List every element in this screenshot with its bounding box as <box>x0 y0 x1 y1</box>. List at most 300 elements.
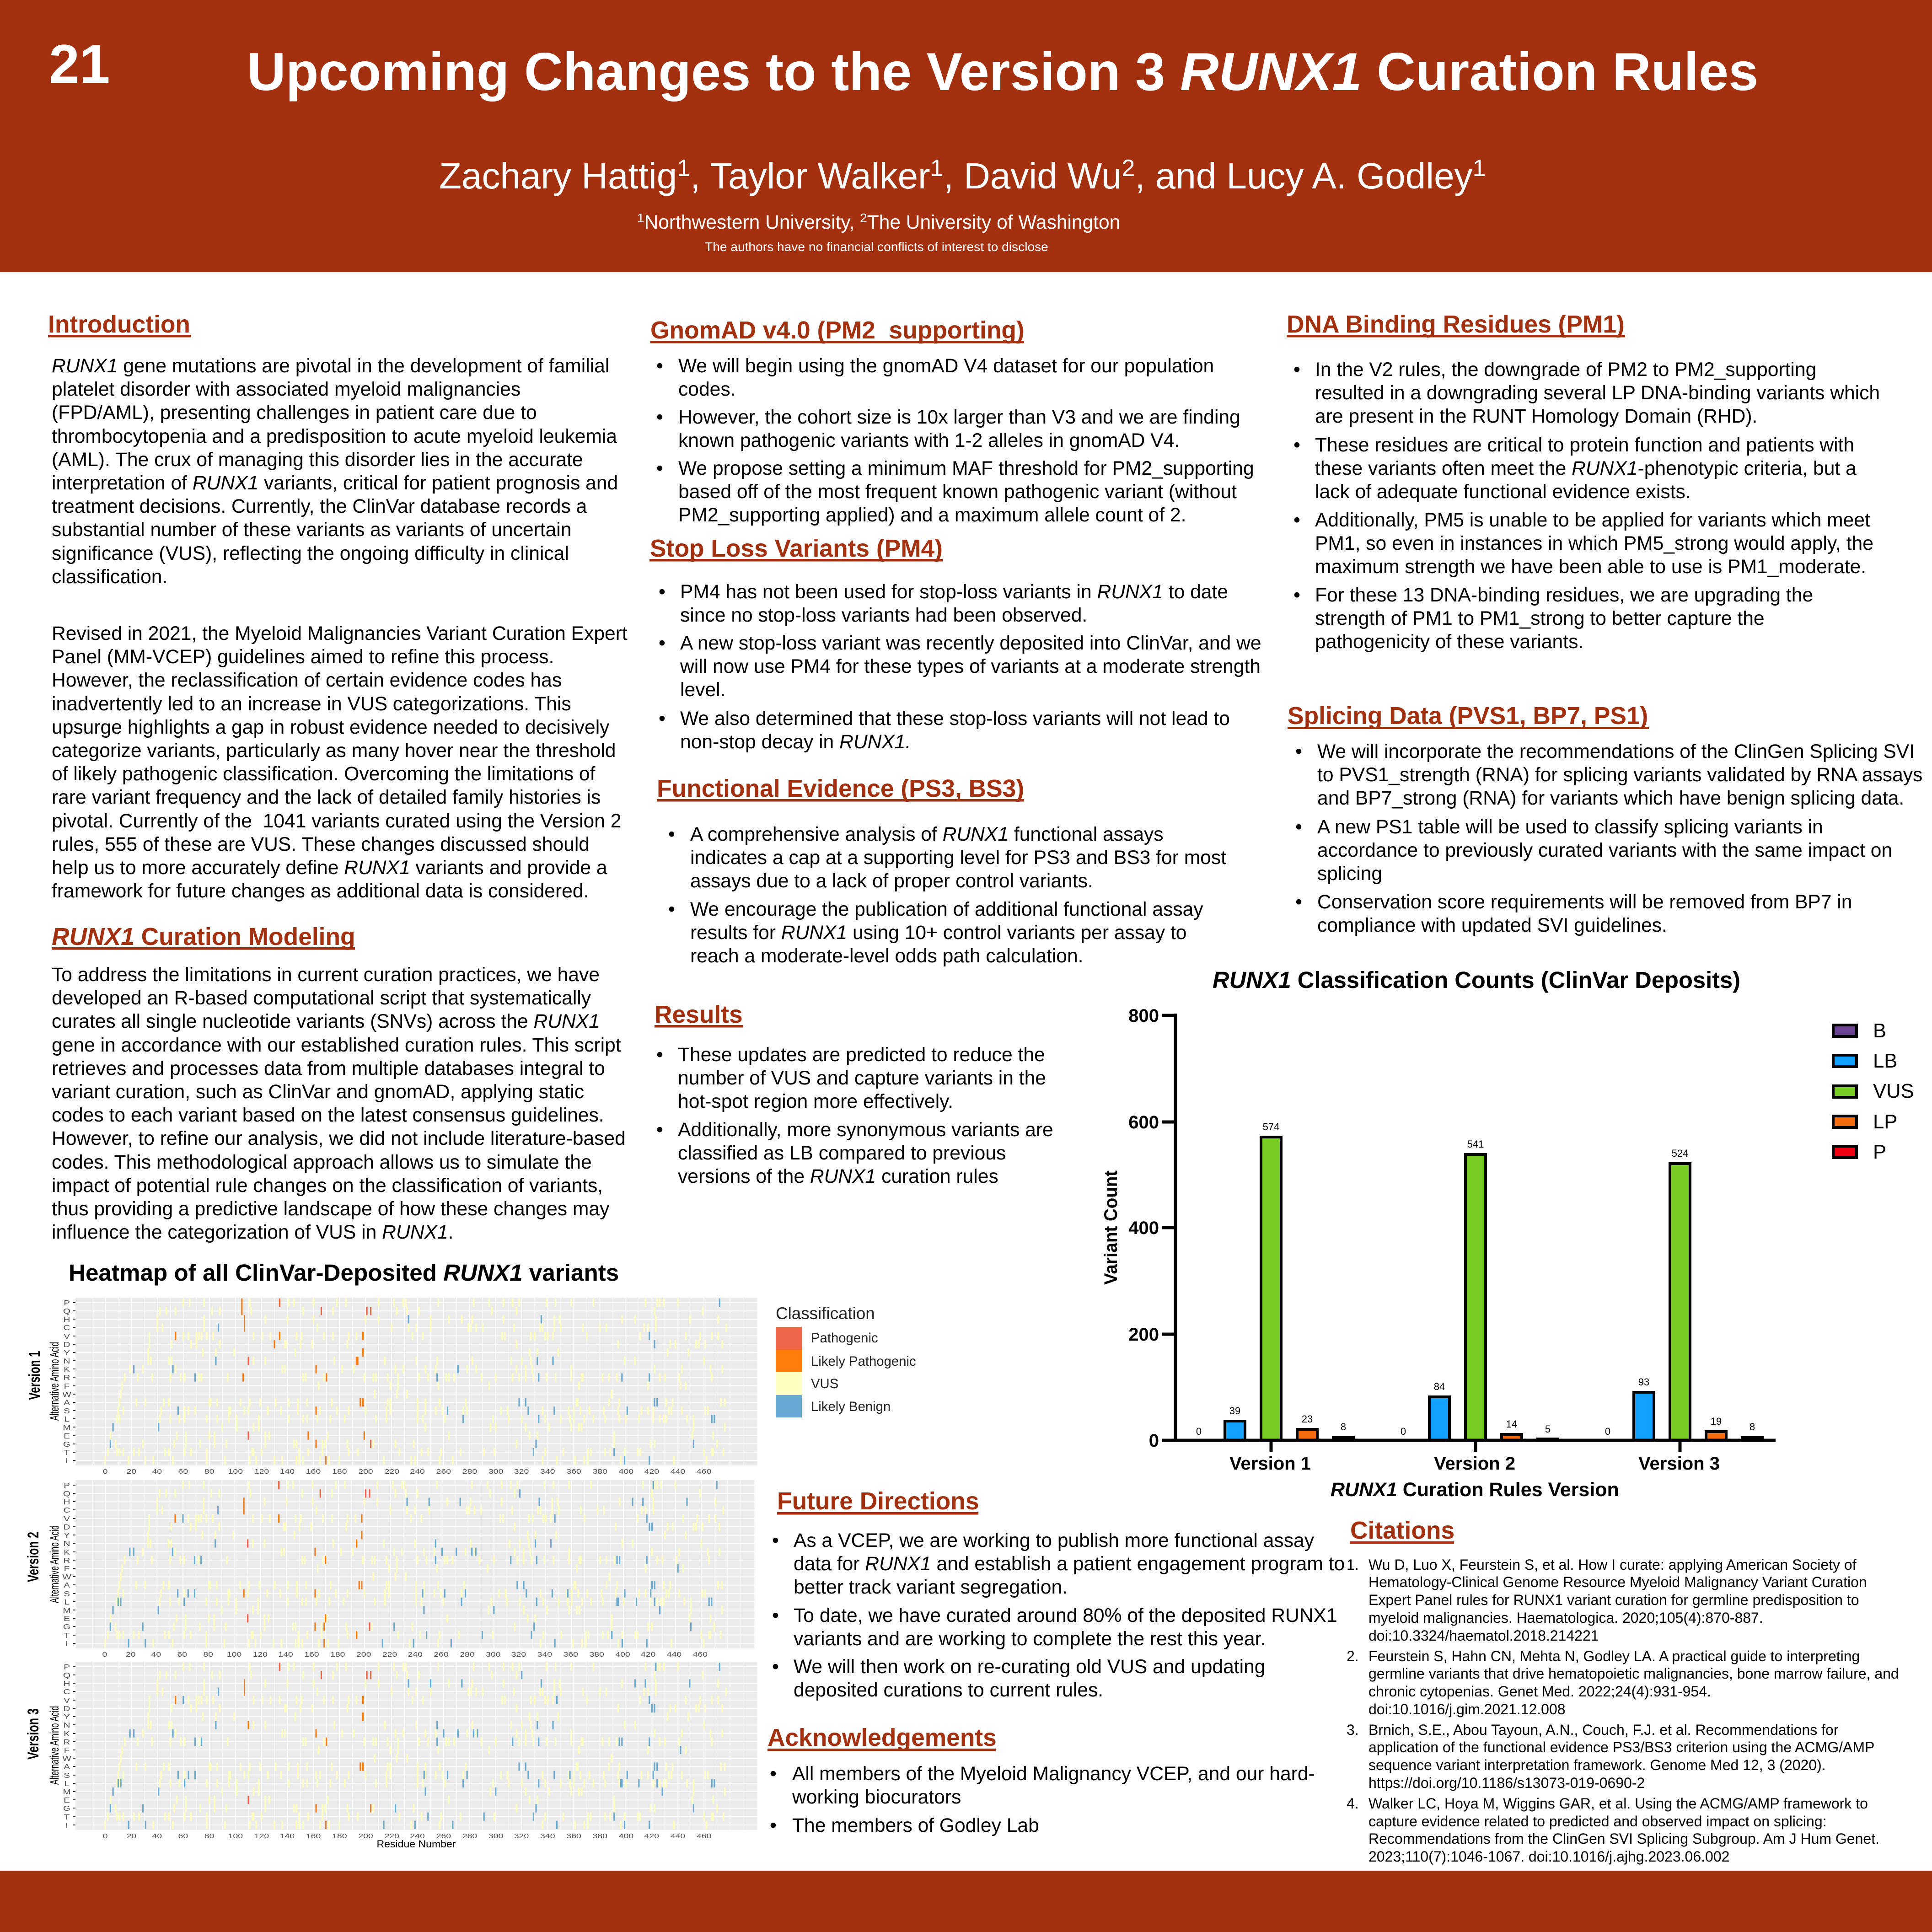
text block: curation modeling: codes to each variant based on the latest consensus guidelines. <box>52 1104 604 1126</box>
bullet list: DNA binding residues: • <box>1293 509 1300 531</box>
swatch: VUS <box>776 1372 838 1395</box>
bullet list: results: hot-spot region more effectively. <box>678 1090 953 1112</box>
reference list: Wu D, Luo X, Feurstein S, et al. How I curate: applying American Society of <box>1368 1556 1857 1573</box>
axis labels: version 3: 40 <box>152 1832 162 1840</box>
y axis title: Variant Count <box>1101 1170 1121 1285</box>
reference list: Hematology-Clinical Genome Resource Myeloid Malignancy Variant Curation <box>1368 1574 1867 1590</box>
authors: 2 <box>1122 155 1135 182</box>
bullet list: functional evidence <box>668 823 1226 967</box>
swatch: likely pathogenic: Likely Pathogenic <box>811 1354 916 1369</box>
axis labels: version 3: W <box>62 1754 71 1762</box>
heading: stop loss: Stop Loss Variants (PM4) <box>650 535 943 562</box>
axis labels: version 2: Y <box>64 1531 70 1539</box>
axis labels: version 2: 0 <box>102 1650 107 1658</box>
axis labels: version 2: F <box>64 1564 70 1572</box>
x axis category labels: Version 2 <box>1434 1454 1515 1474</box>
bullet list: splicing data: and BP7_strong (RNA) for variants which have benign splicing data. <box>1317 787 1904 809</box>
label: alternative amino acid, version 1: Alternative Amino Acid <box>48 1342 61 1421</box>
axis labels: version 1: 340 <box>540 1467 555 1475</box>
axis labels: version 1: 200 <box>358 1467 373 1475</box>
axis labels: version 2: I <box>65 1639 68 1648</box>
bullet list: DNA binding residues: these variants often meet the RUNX1-phenotypic criteria, but a <box>1315 457 1857 479</box>
axis labels: version 3: 420 <box>644 1832 659 1840</box>
axis labels: version 3: D <box>63 1704 70 1712</box>
text block: introduction paragraph 2: framework for future changes as additional data is considered. <box>52 880 589 902</box>
axis labels: version 3: 140 <box>280 1832 295 1840</box>
axis labels: version 2: 460 <box>693 1650 708 1658</box>
bullet list: DNA binding residues: In the V2 rules, the downgrade of PM2 to PM2_supporting <box>1315 359 1816 381</box>
axis labels: version 2: L <box>64 1598 70 1606</box>
axis labels: version 1: 20 <box>126 1467 136 1475</box>
value labels: 574 <box>1263 1121 1279 1132</box>
axis labels: version 1: S <box>64 1406 70 1415</box>
text block: introduction paragraph 2: of likely pathogenic classification. Overcoming the limitations of <box>52 763 596 785</box>
bullet list: splicing data: splicing <box>1317 863 1382 885</box>
axis labels: version 2: 80 <box>203 1650 213 1658</box>
axis labels: version 3: P <box>64 1663 70 1671</box>
axis labels: version 2: D <box>63 1523 70 1531</box>
bullet list: acknowledgements <box>770 1763 1315 1836</box>
axes <box>1162 1014 1776 1452</box>
bullet list: DNA binding residues: lack of adequate functional evidence exists. <box>1315 481 1691 503</box>
bullet list: splicing data: • <box>1295 891 1302 913</box>
y axis tick labels: 600 <box>1128 1112 1159 1132</box>
reference list: 3. <box>1347 1722 1359 1738</box>
text block: introduction paragraph 2: upsurge highlights a gap in robust evidence needed to decisively <box>52 716 610 738</box>
heatmap: version 2 <box>25 1480 754 1658</box>
bullet list: future directions: better track variant segregation. <box>794 1576 1068 1598</box>
axis labels: version 1: 320 <box>514 1467 529 1475</box>
bullet list: future directions: data for RUNX1 and establish a patient engagement program to <box>794 1553 1345 1575</box>
affiliations: 1 <box>637 211 644 225</box>
axis labels: version 2: 360 <box>564 1650 578 1658</box>
reference list: Feurstein S, Hahn CN, Mehta N, Godley LA. A practical guide to interpreting <box>1368 1648 1860 1664</box>
bullet list: acknowledgements: • <box>770 1814 777 1836</box>
heading: citations: Citations <box>1350 1517 1454 1544</box>
axis labels: version 2: 180 <box>330 1650 345 1658</box>
axis labels: version 1: Q <box>63 1307 70 1315</box>
axis labels: version 3: 460 <box>697 1832 711 1840</box>
axis labels: version 3: 440 <box>671 1832 685 1840</box>
bullet list: DNA binding residues <box>1293 359 1880 653</box>
axis labels: version 3: 100 <box>228 1832 243 1840</box>
axis labels: version 3: S <box>64 1771 70 1779</box>
text block: curation modeling: thus providing a predictive landscape of how these changes may <box>52 1198 610 1220</box>
bullet list: gnomAD: • <box>656 457 663 479</box>
axis labels: version 2: 120 <box>253 1650 268 1658</box>
heading: future directions: Future Directions <box>777 1488 979 1515</box>
value labels: 541 <box>1467 1138 1484 1150</box>
reference list: application of the functional evidence PS3/BS3 criterion using the ACMG/AMP <box>1368 1739 1874 1755</box>
text block: curation modeling: impact of potential rule changes on the classification of variants, <box>52 1175 603 1197</box>
axis labels: version 3: 200 <box>358 1832 373 1840</box>
bullet list: gnomAD: We will begin using the gnomAD V4 dataset for our population <box>678 355 1214 377</box>
axis labels: version 2: 380 <box>589 1650 604 1658</box>
bullet list: future directions: • <box>772 1530 779 1551</box>
axis labels: version 1: W <box>62 1390 71 1398</box>
plot area: version 1 <box>75 1298 757 1465</box>
bullet list: results <box>656 1044 1053 1187</box>
value labels: 14 <box>1506 1418 1517 1430</box>
axis labels: version 1: A <box>64 1398 70 1406</box>
bullet list: future directions: variants and are working to complete the rest this year. <box>794 1628 1266 1650</box>
text block: introduction paragraph 1: thrombocytopenia and a predisposition to acute myeloid leukemia <box>52 425 617 447</box>
axis labels: version 3: N <box>63 1721 70 1729</box>
reference list: Walker LC, Hoya M, Wiggins GAR, et al. Using the ACMG/AMP framework to <box>1368 1795 1868 1812</box>
bullet list: splicing data: • <box>1295 741 1302 762</box>
bullet list: splicing data: to PVS1_strength (RNA) for splicing variants validated by RNA assays <box>1317 764 1922 786</box>
axis labels: version 1: M <box>63 1423 71 1431</box>
label: version 2: Version 2 <box>25 1532 42 1582</box>
text block: curation modeling: retrieves and processes data from multiple databases integral to <box>52 1057 605 1079</box>
text block: introduction paragraph 1 <box>52 355 618 588</box>
axis labels: version 2: Q <box>63 1489 70 1497</box>
text block: introduction paragraph 1: (AML). The crux of managing this disorder lies in the accurate <box>52 449 583 471</box>
axis labels: version 1: R <box>63 1373 70 1381</box>
panel: acknowledgements <box>767 1724 1315 1836</box>
authors: 1 <box>930 155 944 182</box>
bullet list: stop loss: We also determined that these stop-loss variants will not lead to <box>680 708 1230 730</box>
reference list <box>1347 1556 1899 1865</box>
bullet list: future directions: deposited curations to current rules. <box>794 1679 1103 1701</box>
reference list: 1. <box>1347 1556 1359 1573</box>
axis labels: version 3: 280 <box>462 1832 477 1840</box>
bullet list: splicing data: We will incorporate the recommendations of the ClinGen Splicing SVI <box>1317 741 1915 762</box>
axis labels: version 1: 120 <box>254 1467 269 1475</box>
bullet list: DNA binding residues: • <box>1293 434 1300 456</box>
axis labels: version 2: H <box>63 1497 70 1506</box>
axis labels: version 2: N <box>63 1539 70 1547</box>
axis labels: version 2: A <box>64 1581 70 1589</box>
axis labels: version 3: A <box>64 1762 70 1771</box>
axis labels: version 2: 240 <box>408 1650 423 1658</box>
axis labels: version 3: 240 <box>410 1832 425 1840</box>
header band <box>0 0 1932 272</box>
axis labels: version 1: P <box>64 1299 70 1307</box>
heading: acknowledgements: Acknowledgements <box>767 1724 997 1751</box>
bullet list: stop loss: • <box>659 708 665 730</box>
authors: 1 <box>677 155 690 182</box>
axis labels: version 1: 420 <box>644 1467 659 1475</box>
bullet list: stop loss: will now use PM4 for these types of variants at a moderate strength <box>680 655 1261 677</box>
bullet list: stop loss: level. <box>680 679 725 701</box>
axis labels: version 1: 280 <box>462 1467 477 1475</box>
x axis category labels: Version 3 <box>1638 1454 1720 1474</box>
text block: introduction paragraph 1: interpretation of RUNX1 variants, critical for patient prognosis and <box>52 472 618 494</box>
axis labels: version 1: V <box>64 1332 70 1340</box>
text block: introduction paragraph 1: RUNX1 gene mutations are pivotal in the development of familial <box>52 355 609 377</box>
axis labels: version 1: 180 <box>332 1467 347 1475</box>
text block: introduction paragraph 1: significance (VUS), reflecting the ongoing difficulty in clinical <box>52 542 569 564</box>
reference list: chronic cytopenias. Genet Med. 2022;24(4):931-954. <box>1368 1683 1711 1700</box>
value labels: 39 <box>1229 1405 1240 1417</box>
bullet list: DNA binding residues: • <box>1293 584 1300 606</box>
bullet list: DNA binding residues: maximum strength we have been able to use is PM1_moderate. <box>1315 556 1866 578</box>
axis labels: version 3: Q <box>63 1671 70 1679</box>
chart legend: LB <box>1873 1050 1897 1072</box>
value labels: 0 <box>1401 1426 1406 1437</box>
bullet list: future directions: We will then work on re-curating old VUS and updating <box>794 1656 1265 1678</box>
axis labels: version 3: 300 <box>488 1832 503 1840</box>
axis labels: version 2: 420 <box>641 1650 655 1658</box>
text block: introduction paragraph 2: Panel (MM-VCEP) guidelines aimed to refine this process. <box>52 646 554 668</box>
axis labels: version 3: 120 <box>254 1832 269 1840</box>
heading: curation modeling: RUNX1 Curation Modeling <box>52 923 355 950</box>
bullet list: stop loss: PM4 has not been used for stop-loss variants in RUNX1 to date <box>680 581 1228 603</box>
axis labels: version 3: 260 <box>436 1832 451 1840</box>
bullet list: stop loss: A new stop-loss variant was recently deposited into ClinVar, and we <box>680 632 1261 654</box>
bullet list: future directions: As a VCEP, we are working to publish more functional assay <box>794 1530 1315 1551</box>
axis labels: version 1: 100 <box>228 1467 243 1475</box>
reference list: doi:10.1016/j.gim.2021.12.008 <box>1368 1701 1566 1717</box>
text block: introduction paragraph 2: help us to more accurately define RUNX1 variants and provide a <box>52 857 607 879</box>
axis labels: version 3: 220 <box>384 1832 399 1840</box>
title: Upcoming Changes to the Version 3 RUNX1 Curation Rules <box>247 42 1758 102</box>
axis labels: version 3: M <box>63 1787 71 1796</box>
heading: gnomAD: GnomAD v4.0 (PM2 supporting) <box>650 317 1025 344</box>
bullet list: functional evidence: results for RUNX1 using 10+ control variants per assay to <box>690 922 1186 944</box>
axis labels: version 1: 0 <box>103 1467 108 1475</box>
axis labels: version 3: 320 <box>514 1832 529 1840</box>
text block: introduction paragraph 1: treatment decisions. Currently, the ClinVar database records a <box>52 495 587 517</box>
axis labels: version 3: 80 <box>204 1832 214 1840</box>
bullet list: future directions <box>772 1530 1345 1701</box>
axis labels: version 1: 360 <box>566 1467 581 1475</box>
reference list: https://doi.org/10.1186/s13073-019-0690-2 <box>1368 1775 1645 1791</box>
bullet list: results: • <box>656 1119 663 1141</box>
value labels: 8 <box>1750 1421 1755 1433</box>
axis labels: version 1: K <box>64 1365 70 1373</box>
axis labels: version 3: 180 <box>332 1832 347 1840</box>
value labels <box>1196 1121 1755 1437</box>
heading: introduction: Introduction <box>48 311 190 338</box>
axis labels: version 3: V <box>64 1696 70 1704</box>
authors: 1 <box>1473 155 1486 182</box>
axis labels: version 3: Y <box>64 1712 70 1721</box>
axis labels: version 2: T <box>64 1631 70 1639</box>
reference list: capture evidence related to predicted and observed impact on splicing: <box>1368 1813 1827 1830</box>
axis labels: version 2: P <box>64 1481 70 1489</box>
bullet list: functional evidence: indicates a cap at a supporting level for PS3 and BS3 for most <box>690 847 1226 869</box>
reference list: germline variants that drive hematopoietic malignancies, bone marrow failure, and <box>1368 1665 1899 1682</box>
axis labels: version 1: 300 <box>488 1467 503 1475</box>
axis labels: version 1: 400 <box>619 1467 633 1475</box>
axis labels: version 2: 220 <box>382 1650 397 1658</box>
text block: curation modeling: However, to refine our analysis, we did not include literature-based <box>52 1127 626 1149</box>
bullet list: functional evidence: reach a moderate-level odds path calculation. <box>690 945 1083 967</box>
bullet list: stop loss: since no stop-loss variants had been observed. <box>680 604 1087 626</box>
bullet list: acknowledgements: working biocurators <box>792 1786 961 1808</box>
reference list: Expert Panel rules for RUNX1 variant curation for germline predisposition to <box>1368 1592 1859 1608</box>
text block: introduction paragraph 2: However, the reclassification of certain evidence codes has <box>52 669 562 691</box>
swatch: likely benign: Likely Benign <box>811 1399 891 1414</box>
axis labels: version 1: 80 <box>204 1467 214 1475</box>
axis labels: version 2: 300 <box>486 1650 501 1658</box>
heading: DNA binding residues: DNA Binding Residues (PM1) <box>1287 311 1625 338</box>
bullet list: DNA binding residues: Additionally, PM5 is unable to be applied for variants which meet <box>1315 509 1870 531</box>
panel: introduction <box>48 311 628 902</box>
bars: version 3 <box>1634 1164 1762 1440</box>
axis labels: version 2: G <box>63 1622 70 1631</box>
affiliations: Northwestern University, <box>644 212 860 233</box>
axis labels: version 1: 220 <box>384 1467 399 1475</box>
axis labels: version 2: 280 <box>460 1650 475 1658</box>
label: version 3: Version 3 <box>25 1708 42 1760</box>
axis labels: version 1: C <box>63 1323 70 1331</box>
poster number: 21 <box>49 33 110 95</box>
label: version 1: Version 1 <box>26 1351 43 1400</box>
axis labels: version 3: T <box>64 1813 70 1821</box>
chart legend: B <box>1873 1020 1886 1042</box>
bullet list: functional evidence: • <box>668 898 675 920</box>
bullet list: results: classified as LB compared to previous <box>678 1142 1006 1164</box>
footer band <box>0 1871 1932 1932</box>
label: residue number: Residue Number <box>377 1838 456 1850</box>
axis labels: version 2: W <box>62 1572 71 1581</box>
text block: introduction paragraph 2: inadvertently led to an increase in VUS categorizations. This <box>52 693 571 715</box>
x axis category labels: Version 1 <box>1229 1454 1311 1474</box>
bullet list: future directions: • <box>772 1605 779 1626</box>
bullet list: functional evidence: A comprehensive analysis of RUNX1 functional assays <box>690 823 1164 845</box>
axis labels: version 3: 0 <box>103 1832 108 1840</box>
authors: , David Wu <box>944 156 1122 196</box>
affiliations: 2 <box>860 211 867 225</box>
text block: curation modeling: developed an R-based computational script that systematically <box>52 987 591 1009</box>
panel: splicing data <box>1288 703 1922 936</box>
axis labels: version 2: 40 <box>151 1650 161 1658</box>
axis labels: version 3: H <box>63 1679 70 1687</box>
label: alternative amino acid, version 3: Alternative Amino Acid <box>48 1706 61 1785</box>
axis labels: version 3: 400 <box>619 1832 633 1840</box>
bullet list: DNA binding residues: strength of PM1 to PM1_strong to better capture the <box>1315 607 1765 629</box>
reference list: Recommendations from the ClinGen SVI Splicing Subgroup. Am J Hum Genet. <box>1368 1830 1879 1847</box>
axis labels: version 3: 160 <box>306 1832 321 1840</box>
y axis tick labels: 400 <box>1128 1218 1159 1238</box>
value labels: 84 <box>1434 1381 1445 1392</box>
bullet list: acknowledgements: All members of the Myeloid Malignancy VCEP, and our hard- <box>792 1763 1315 1785</box>
axis labels: version 3: G <box>63 1804 70 1812</box>
panel: citations <box>1347 1517 1899 1865</box>
bullet list: stop loss: non-stop decay in RUNX1. <box>680 731 911 753</box>
axis labels: version 1: I <box>65 1456 68 1465</box>
bullet list: gnomAD <box>656 355 1254 526</box>
bullet list: acknowledgements: The members of Godley Lab <box>792 1814 1039 1836</box>
axis labels: version 1: 40 <box>152 1467 162 1475</box>
chart title: RUNX1 Classification Counts (ClinVar Deposits) <box>1213 967 1740 993</box>
value labels: 19 <box>1711 1416 1722 1427</box>
text block: curation modeling: gene in accordance with our established curation rules. This script <box>52 1034 621 1056</box>
axis labels: version 2: 440 <box>667 1650 682 1658</box>
chart legend <box>1833 1020 1914 1163</box>
bullet list: splicing data: Conservation score requirements will be removed from BP7 in <box>1317 891 1852 913</box>
value labels: 23 <box>1302 1413 1313 1425</box>
axis labels: version 1: N <box>63 1357 70 1365</box>
axis labels: version 1: 140 <box>280 1467 295 1475</box>
swatch: pathogenic: Pathogenic <box>811 1331 878 1346</box>
bullet list: splicing data <box>1295 741 1922 936</box>
axis labels: version 1: 380 <box>592 1467 607 1475</box>
label: alternative amino acid, version 2: Alternative Amino Acid <box>48 1525 61 1603</box>
panel: curation modeling <box>52 923 626 1243</box>
bar chart: classification counts <box>1101 967 1914 1501</box>
axis labels: version 2: M <box>63 1606 71 1614</box>
bullet list: stop loss: • <box>659 581 665 603</box>
bullet list: stop loss <box>659 581 1261 753</box>
text block: curation modeling: variant curation, such as ClinVar and gnomAD, applying static <box>52 1081 584 1103</box>
axis labels: version 2: 200 <box>356 1650 371 1658</box>
axis labels: version 2: V <box>64 1514 70 1523</box>
axis labels: version 3: I <box>65 1821 68 1829</box>
reference list: 2. <box>1347 1648 1359 1664</box>
text block: introduction paragraph 1: (FPD/AML), presenting challenges in patient care due to <box>52 402 537 424</box>
bullet list: gnomAD: • <box>656 406 663 428</box>
axis labels: version 3: C <box>63 1687 70 1696</box>
panel: stop loss <box>649 535 1261 753</box>
heading: results: Results <box>655 1001 743 1028</box>
axis labels: version 2: R <box>63 1556 70 1564</box>
chart legend: VUS <box>1873 1080 1914 1102</box>
bullet list: gnomAD: PM2_supporting applied) and a maximum allele count of 2. <box>678 504 1186 526</box>
text block: introduction paragraph 1: substantial number of these variants as variants of uncertain <box>52 519 571 541</box>
bullet list: results: These updates are predicted to reduce the <box>678 1044 1045 1066</box>
value labels: 0 <box>1605 1426 1610 1437</box>
text block: curation modeling <box>52 964 626 1243</box>
axis labels: version 2: 140 <box>278 1650 293 1658</box>
bullet list: functional evidence: • <box>668 823 675 845</box>
bullet list: gnomAD: However, the cohort size is 10x larger than V3 and we are finding <box>678 406 1240 428</box>
axis labels: version 1: 460 <box>697 1467 711 1475</box>
heatmap: version 3 <box>25 1662 757 1850</box>
axis labels: version 2: 100 <box>227 1650 242 1658</box>
axis labels: version 1: 160 <box>306 1467 321 1475</box>
y axis tick labels: 0 <box>1149 1431 1159 1451</box>
text block: introduction paragraph 1: classification. <box>52 566 167 588</box>
text block: introduction paragraph 2 <box>52 623 628 902</box>
panel: results <box>655 1001 1053 1187</box>
legend: heatmap classification <box>776 1304 916 1417</box>
axis labels: version 2: 260 <box>434 1650 449 1658</box>
value labels: 93 <box>1638 1376 1649 1388</box>
bullet list: functional evidence: assays due to a lack of proper control variants. <box>690 870 1093 892</box>
heading: splicing data: Splicing Data (PVS1, BP7, PS1) <box>1288 703 1648 730</box>
y axis tick labels <box>1128 1006 1159 1451</box>
axis labels: version 1: T <box>64 1448 70 1456</box>
axis labels: version 2: S <box>64 1589 70 1598</box>
plot area: version 2 <box>75 1480 754 1648</box>
axis labels: version 1 <box>62 1299 711 1475</box>
panel: functional evidence <box>657 775 1226 967</box>
value labels: 8 <box>1341 1421 1346 1433</box>
axis labels: version 3: K <box>64 1729 70 1738</box>
bullet list: functional evidence: We encourage the publication of additional functional assay <box>690 898 1203 920</box>
authors: , and Lucy A. Godley <box>1135 156 1473 196</box>
reference list: doi:10.3324/haematol.2018.214221 <box>1368 1627 1599 1644</box>
heading: heatmap title: Heatmap of all ClinVar-Deposited RUNX1 variants <box>69 1260 619 1286</box>
x axis category labels <box>1229 1454 1720 1474</box>
bullet list: DNA binding residues: For these 13 DNA-binding residues, we are upgrading the <box>1315 584 1813 606</box>
text block: introduction paragraph 1: platelet disorder with associated myeloid malignancies <box>52 378 521 400</box>
bullet list: gnomAD: We propose setting a minimum MAF threshold for PM2_supporting <box>678 457 1254 479</box>
text block: curation modeling: codes. This methodological approach allows us to simulate the <box>52 1151 592 1173</box>
bullet list: gnomAD: based off of the most frequent known pathogenic variant (without <box>678 481 1237 503</box>
text block: introduction paragraph 2: categorize variants, particularly as many hover near the threshold <box>52 740 616 762</box>
bullet list: results: number of VUS and capture variants in the <box>678 1067 1046 1089</box>
axis labels: version 3: 380 <box>592 1832 607 1840</box>
bullet list: gnomAD: known pathogenic variants with 1-2 alleles in gnomAD V4. <box>678 429 1180 451</box>
axis labels: version 1: 60 <box>178 1467 188 1475</box>
legend: heatmap classification: Classification <box>776 1304 875 1323</box>
bullet list: splicing data: • <box>1295 816 1302 838</box>
